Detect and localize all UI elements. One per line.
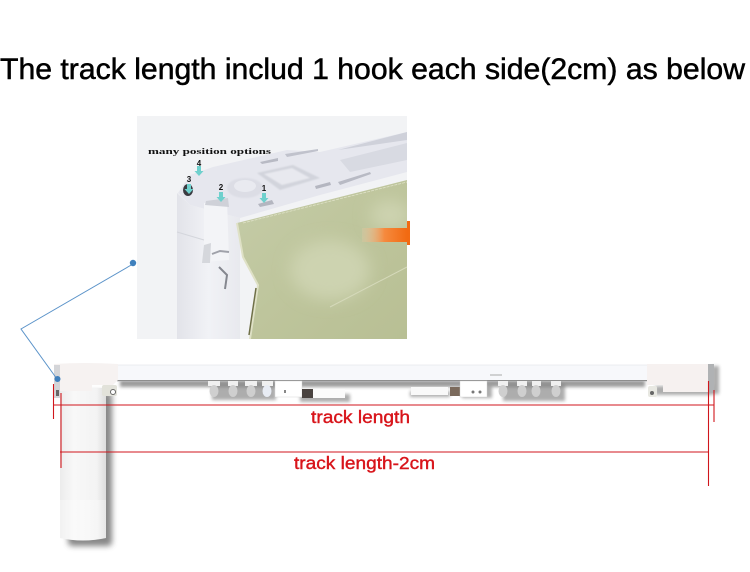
dimension: track length: [53, 384, 714, 422]
position markers: [184, 159, 268, 203]
right end cap: [647, 364, 714, 397]
dimension: track length minus 2cm: [60, 381, 709, 486]
title: The track length includ 1 hook each side(2cm) as below: [0, 53, 746, 86]
track rail: [117, 365, 649, 381]
left end hook: [102, 385, 117, 396]
photo: orange arrow: [362, 221, 410, 245]
track assembly: [54, 363, 719, 546]
callout: blue leader line: [21, 260, 136, 382]
panel: bracket photo: [137, 116, 410, 339]
track shadow: [120, 380, 645, 387]
photo label: many position options: [148, 147, 272, 156]
photo: bracket body: [177, 193, 240, 339]
shadow: runners and carriers: [212, 366, 719, 402]
label: track length: track length: [311, 407, 410, 427]
runners right: [498, 381, 561, 397]
runners left: [208, 381, 273, 397]
motor body: [60, 388, 106, 540]
position markers: 1: [262, 184, 267, 193]
label: track length-2cm: track length-2cm: [294, 453, 435, 473]
motor head: [54, 363, 118, 398]
position markers: 2: [219, 183, 224, 192]
photo: green cloth: [237, 180, 410, 339]
centre carriers: [275, 381, 487, 398]
position markers: 4: [197, 159, 202, 168]
position markers: 3: [187, 175, 192, 184]
motor shadow: [68, 392, 112, 546]
photo: rail and bracket top: [178, 132, 407, 218]
